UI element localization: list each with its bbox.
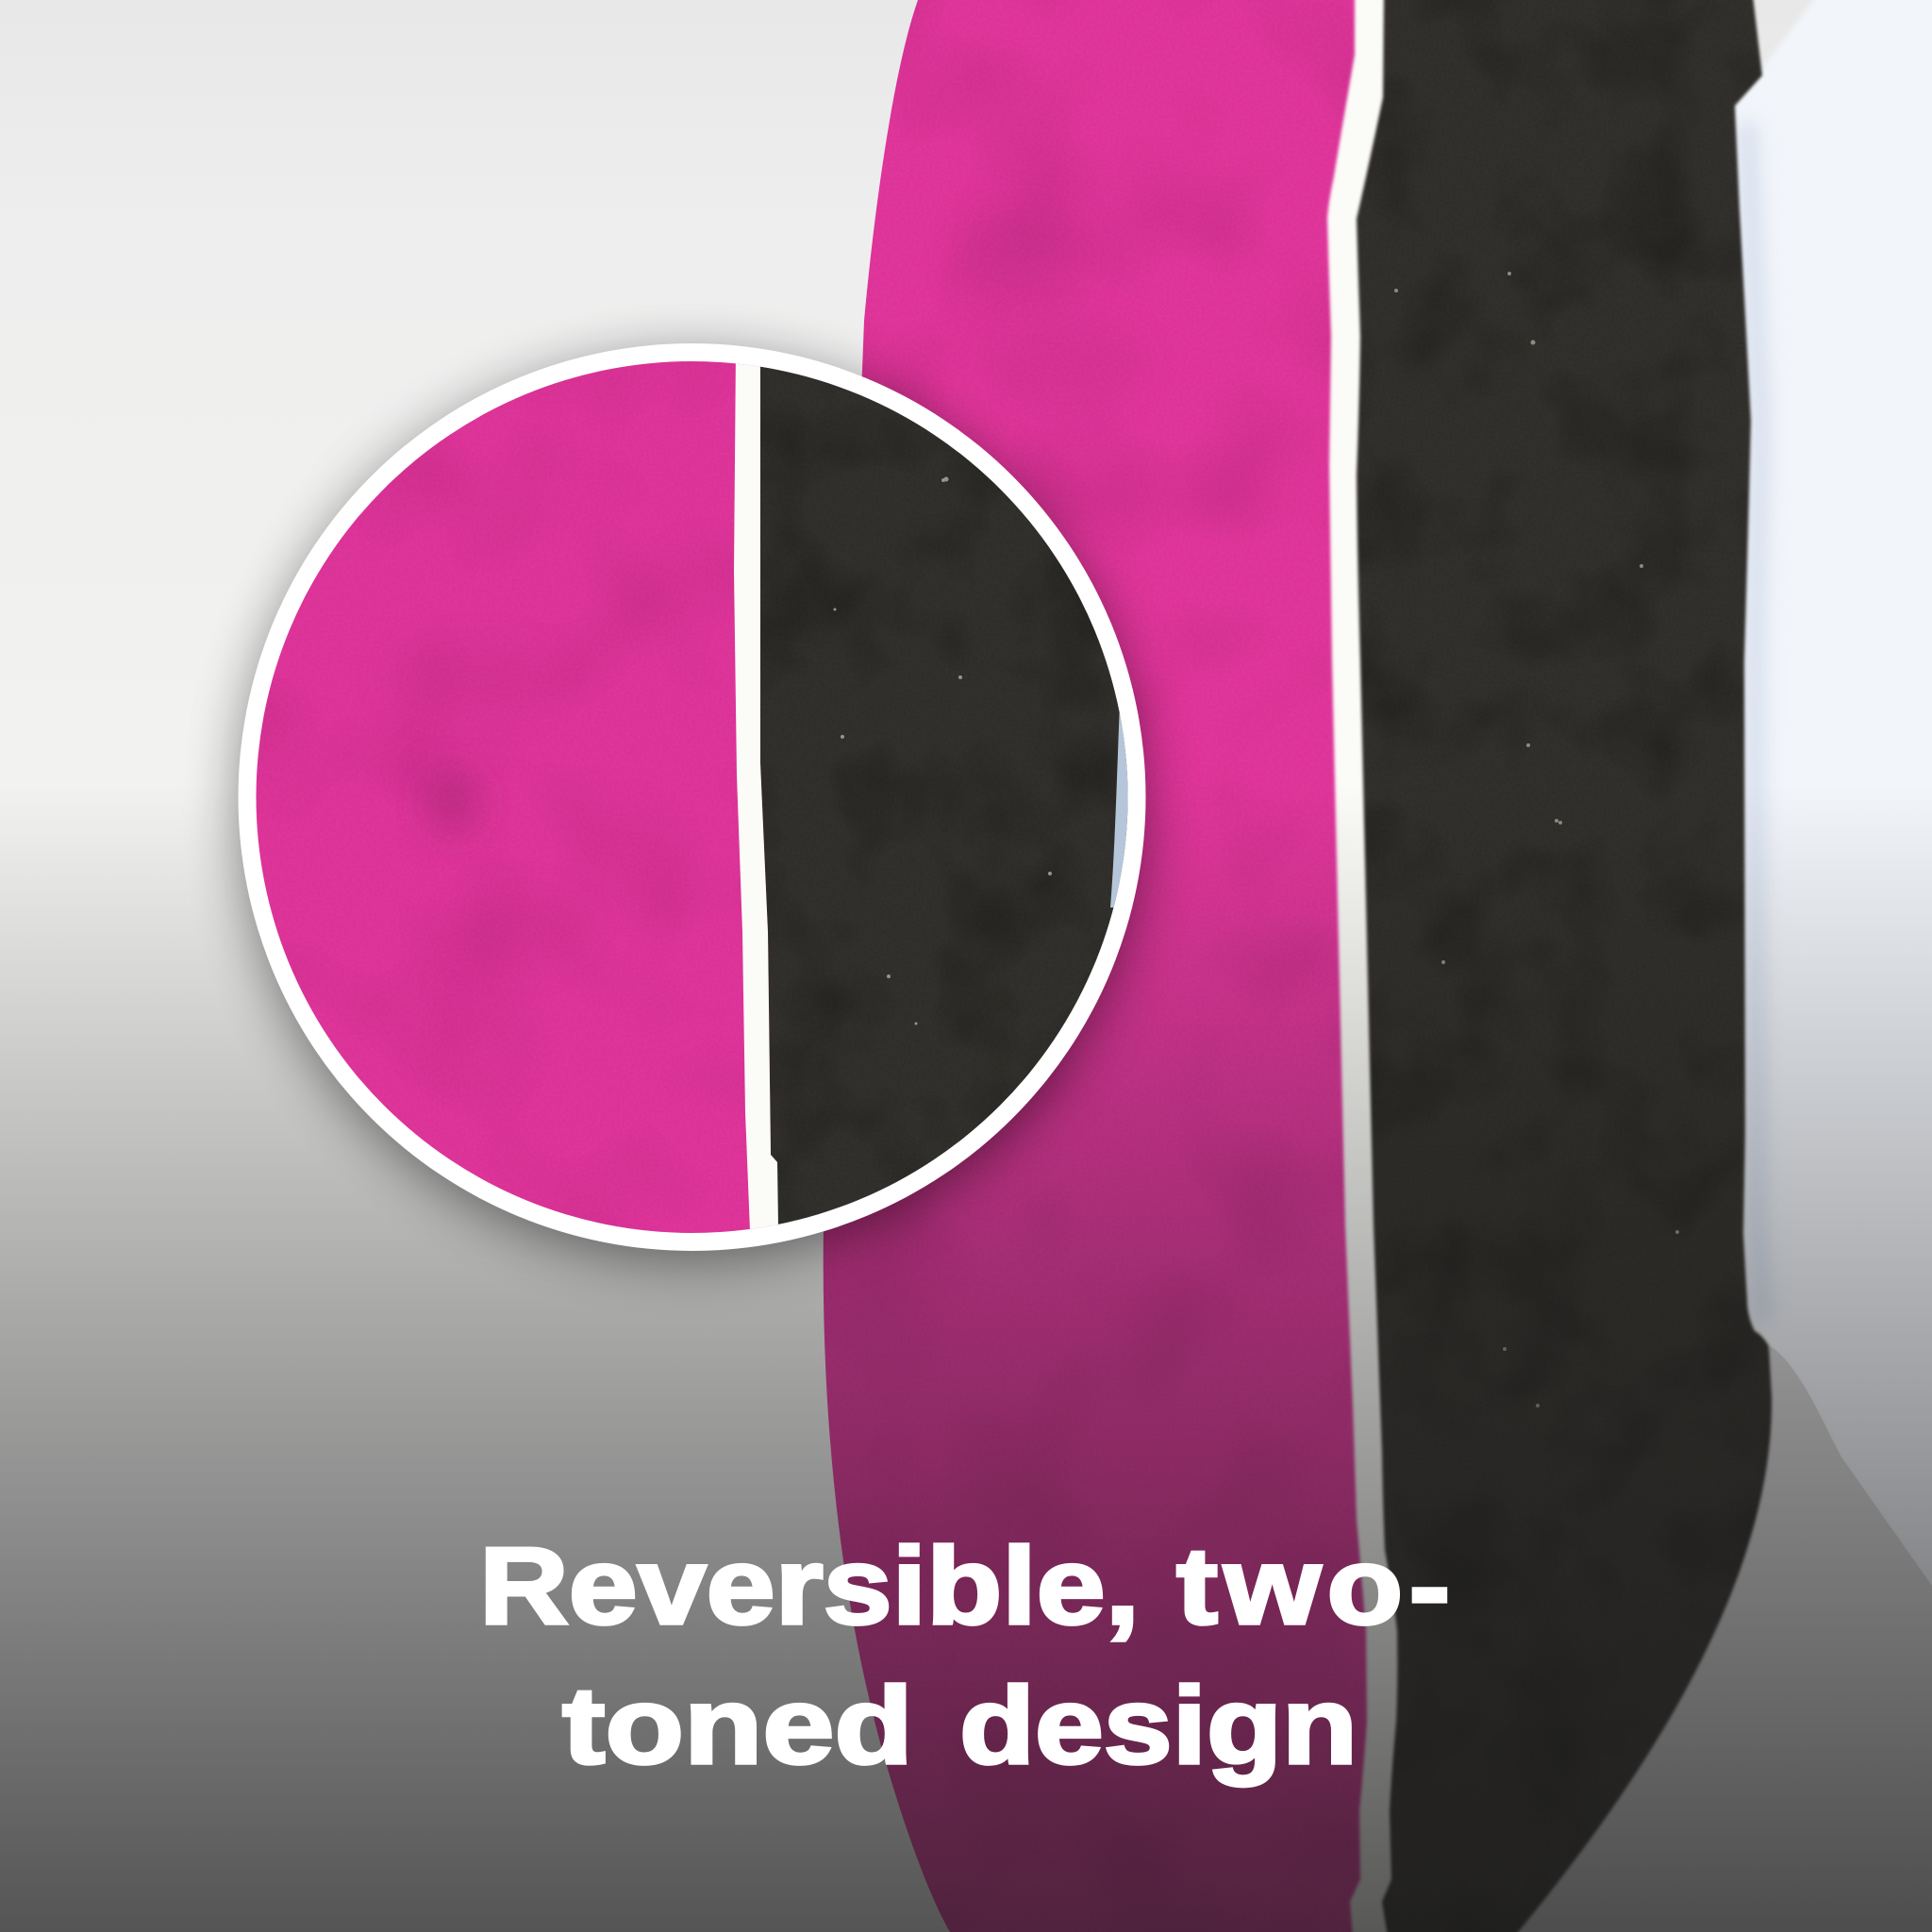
headline line 2	[562, 1664, 1357, 1787]
close-up: pink fabric	[245, 349, 774, 1255]
pillow: pink side	[811, 0, 1396, 1932]
blue tint along pillow edge	[1747, 123, 1762, 1321]
headline	[479, 1525, 1457, 1787]
headline line 1: Reversible,	[479, 1525, 1140, 1647]
headline line 1: two-	[1176, 1525, 1457, 1647]
headline line 2: toned	[562, 1664, 913, 1787]
pillow: white piping	[1327, 0, 1402, 1932]
headline line 2: design	[959, 1665, 1357, 1787]
close-up: white piping	[734, 349, 778, 1255]
close-up: blue gap at right edge	[1110, 712, 1128, 908]
pillow: black side	[1355, 0, 1774, 1932]
fabric specks	[1394, 272, 1679, 1407]
callout fabric close-up	[245, 349, 1141, 1255]
callout drop shadow	[242, 358, 1143, 1259]
headline line 1	[479, 1525, 1457, 1647]
circular zoom callout	[238, 343, 1145, 1259]
bottom dark gradient overlay	[0, 783, 1932, 1932]
callout white ring	[238, 343, 1145, 1251]
grey surface below cushion	[1509, 1346, 1932, 1932]
close-up: black fabric	[760, 349, 1141, 1255]
white cushion behind pillow	[1698, 0, 1932, 1599]
